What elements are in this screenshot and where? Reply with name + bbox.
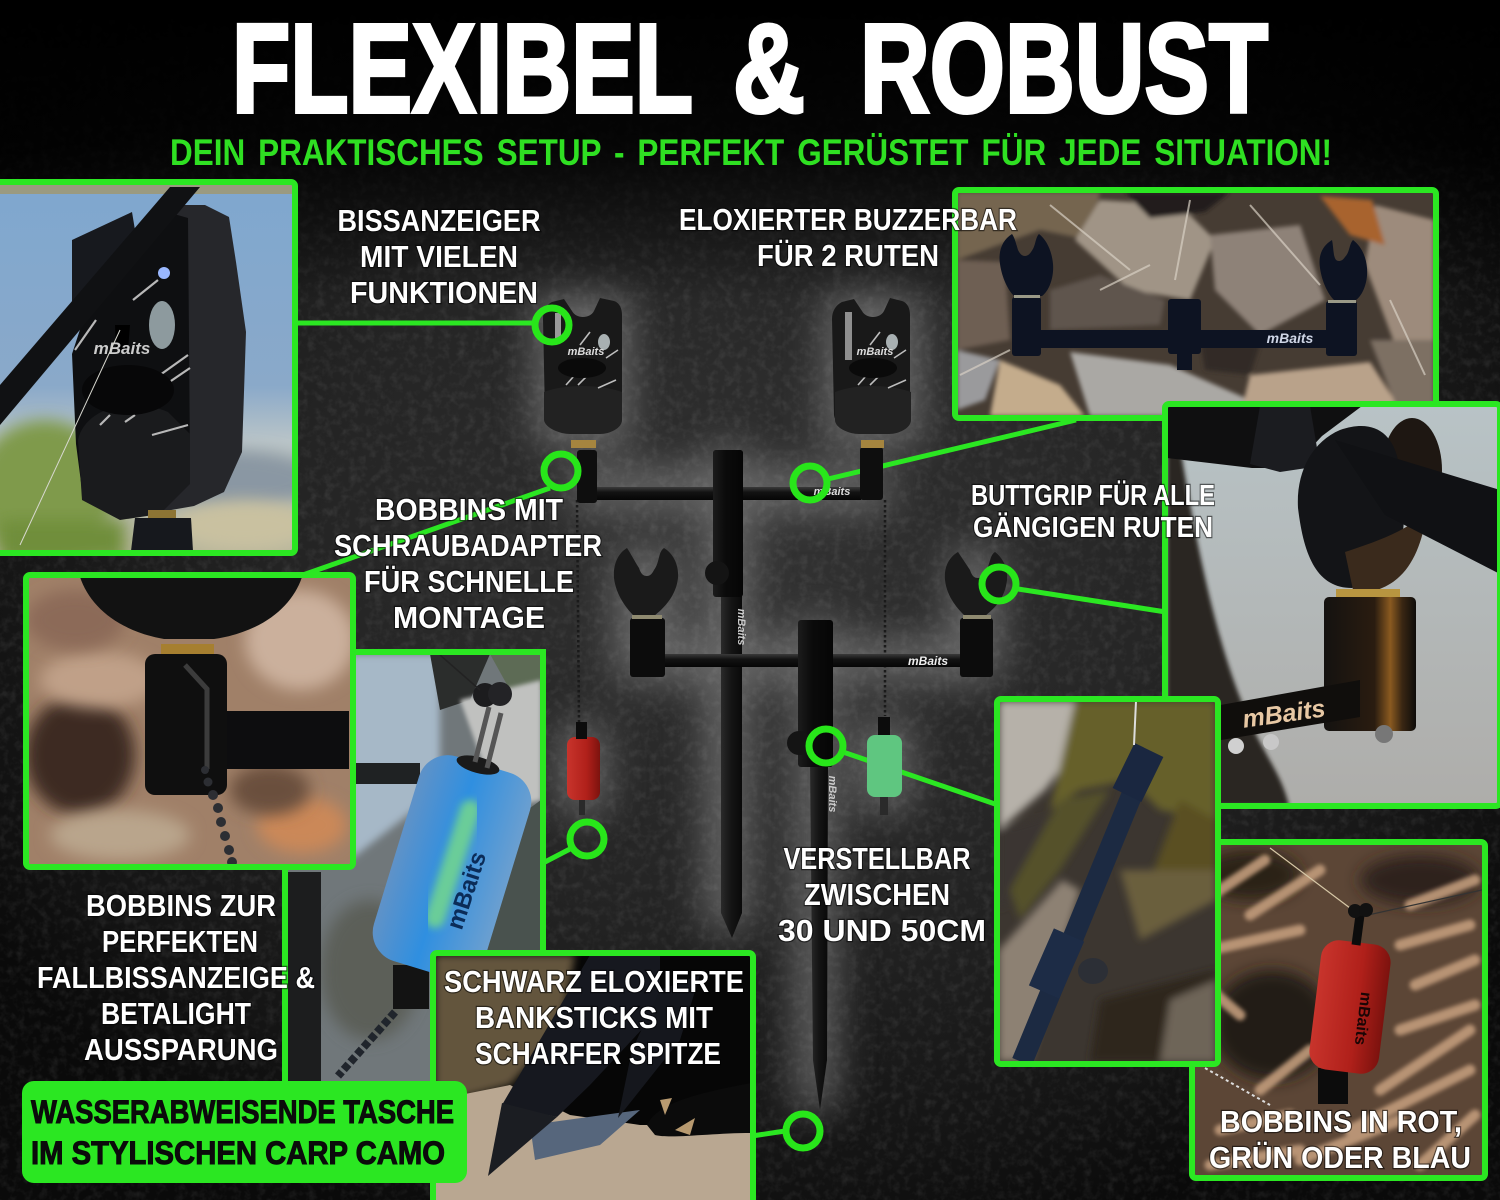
panel: bite alarm photo: mBaits [94,339,150,358]
panel: blue bobbin photo [285,652,543,1100]
rear buzzer bar [577,447,883,510]
label: buzzerbar: FÜR 2 RUTEN [757,238,939,273]
panel: red bobbin photo [1192,842,1485,1178]
alarm face [72,215,190,482]
label: schwarz eloxierte banksticks: SCHWARZ ELOXIERTE [444,964,744,999]
panel: bankstick tips photo [433,953,753,1200]
bite alarm right [832,298,911,448]
label: buttgrip: GÄNGIGEN RUTEN [973,511,1213,544]
panel: buzzer bar photo: mBaits [1267,330,1314,346]
alarm side [164,205,246,510]
label: bobbins mit schraubadapter: BOBBINS MIT [375,492,563,527]
panel: bankstick photo [997,699,1218,1064]
label: bobbins in rot, gruen oder blau: BOBBINS IN ROT, [1220,1104,1462,1139]
panel: red bobbin photo: mBaits [1351,991,1374,1046]
marker circles [535,308,1016,1148]
rear buzzer bar: mBaits [814,486,850,498]
label: schwarz eloxierte banksticks: SCHARFER SPITZE [475,1036,721,1071]
label: buttgrip: BUTTGRIP FÜR ALLE [971,479,1215,512]
callout: wasserabweisende tasche: WASSERABWEISENDE TASCHE [31,1094,454,1130]
label: bobbins zur fallbissanzeige: BOBBINS ZUR [86,888,276,923]
title [232,0,1268,139]
label: buzzerbar: ELOXIERTER BUZZERBAR [679,202,1017,237]
title: ROBUST [860,0,1268,139]
label: bobbins mit schraubadapter: SCHRAUBADAPTER [334,528,602,563]
label: verstellbar: 30 UND 50CM [778,913,986,948]
label: bobbins zur fallbissanzeige: AUSSPARUNG [84,1032,278,1067]
subtitle: DEIN PRAKTISCHES SETUP - PERFEKT GERÜSTET FÜR JEDE SITUATION! [170,132,1332,173]
front bankstick [787,620,838,1110]
label: verstellbar: ZWISCHEN [804,877,950,912]
panel: blue bobbin photo: mBaits [442,848,492,933]
bite alarm left [543,298,622,448]
rod [0,187,200,425]
label: bobbins mit schraubadapter: FÜR SCHNELLE [364,564,574,599]
callout: wasserabweisende tasche [22,1081,467,1183]
label: bobbins zur fallbissanzeige: PERFEKTEN [102,924,258,959]
label: bissanzeiger: MIT VIELEN [360,239,518,274]
label: bobbins zur fallbissanzeige: FALLBISSANZEIGE & [37,960,315,995]
blurred background arc [1167,440,1289,806]
label: bissanzeiger: FUNKTIONEN [350,275,538,310]
label: bissanzeiger: BISSANZEIGER [338,203,540,238]
front buzzer bar: mBaits [908,654,948,668]
panel: bobbin adapter photo [25,575,355,867]
front bankstick: mBaits [826,776,838,812]
right rod rest [945,552,1007,616]
panel: bite alarm photo [0,182,320,560]
label: bobbins in rot, gruen oder blau: GRÜN ODER BLAU [1209,1140,1471,1175]
label: bobbins mit schraubadapter: MONTAGE [393,600,545,635]
title: & [733,0,805,139]
rod and grip [1167,406,1362,468]
rear bankstick [705,450,747,938]
bite alarm left: mBaits [568,346,604,358]
green bobbin [867,717,902,815]
callout: wasserabweisende tasche: IM STYLISCHEN CARP CAMO [31,1135,445,1171]
label: verstellbar: VERSTELLBAR [784,841,970,876]
red bobbin [567,722,600,815]
rear alarm [72,212,135,301]
left rod rest [614,548,678,616]
label: schwarz eloxierte banksticks: BANKSTICKS MIT [475,1000,713,1035]
connector lines [295,323,1166,1136]
panel: buzzer bar photo [955,190,1436,418]
central product: banksticks and buzzer bars [543,298,1007,1110]
bite alarm right: mBaits [857,346,893,358]
label: bobbins zur fallbissanzeige: BETALIGHT [101,996,251,1031]
rear bankstick: mBaits [735,609,747,645]
chains [577,500,885,722]
title: FLEXIBEL [232,0,693,139]
front buzzer bar [614,548,1007,677]
panel: buttgrip photo [1165,404,1500,806]
panel: buttgrip photo: mBaits [1241,694,1327,734]
